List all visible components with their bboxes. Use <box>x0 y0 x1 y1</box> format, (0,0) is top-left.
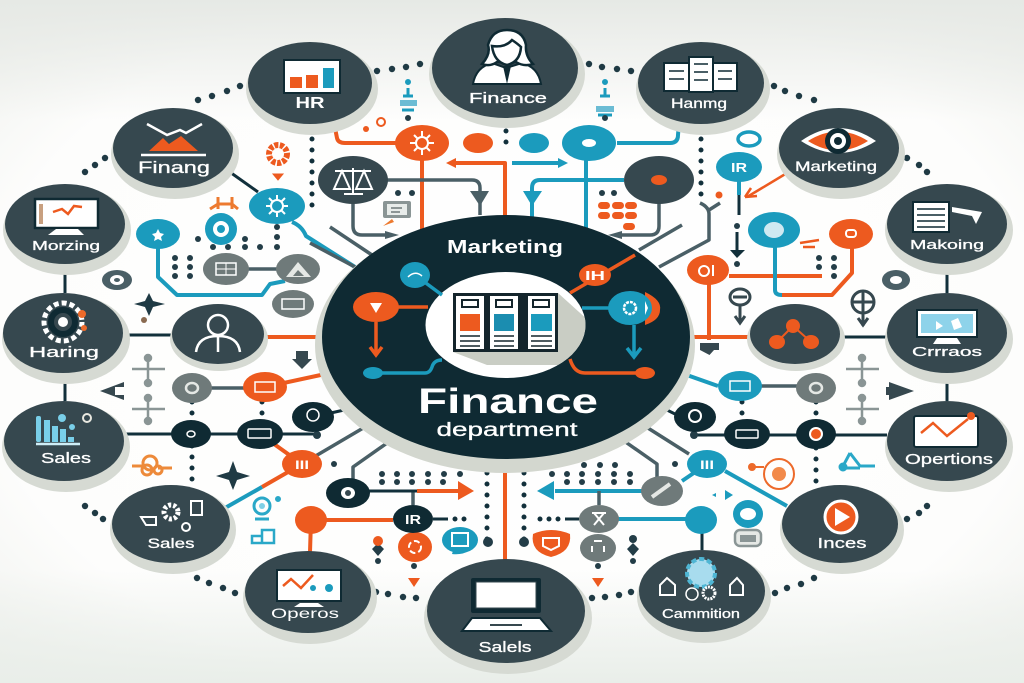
small icon: orange mini left <box>132 456 172 475</box>
small icon: speech bubble <box>738 132 760 146</box>
secondary nodes lower left <box>171 372 433 534</box>
panel: Sales lower left <box>110 485 236 574</box>
panel: Sales left <box>2 401 130 492</box>
icon: star <box>134 293 165 323</box>
secondary nodes upper left <box>136 125 493 318</box>
node: dark target <box>326 478 370 508</box>
node: orange grid: III <box>295 458 309 472</box>
node: dark target <box>796 419 836 449</box>
panel: Crrraos <box>885 293 1013 384</box>
panel: central hub <box>315 215 695 473</box>
heading: Finance: Finance <box>418 382 598 421</box>
small icon: gray box <box>735 530 761 546</box>
panel: HR <box>246 42 378 135</box>
panel: Makoing <box>885 184 1013 275</box>
node: gray triangle <box>276 254 320 284</box>
node: gray pen <box>641 476 683 506</box>
node: teal blob <box>519 133 549 153</box>
small icon: gray loop <box>580 534 616 562</box>
panel: Haring <box>2 293 130 384</box>
icon: monitor <box>35 199 98 235</box>
node: gray x <box>579 505 619 533</box>
panel: Marketing eye <box>777 108 905 199</box>
icon: play <box>825 501 857 533</box>
icon: paper and key <box>913 202 982 232</box>
icon: eye <box>801 128 876 154</box>
small icon: ring with arrow left <box>730 289 750 323</box>
small icon: orange shield <box>533 530 570 557</box>
node: dark card <box>237 419 283 449</box>
icon: star lower <box>216 461 250 490</box>
label: Crrraos <box>912 344 983 359</box>
node: IR: IR <box>731 160 748 175</box>
small icon: teal ring <box>205 213 237 245</box>
small icon: orange loop <box>398 532 432 562</box>
label: Cammition <box>662 606 740 621</box>
label: Opertions <box>905 451 993 468</box>
node: teal grid: III <box>700 458 714 472</box>
dotted vertical links <box>192 120 816 540</box>
panel: Hanmg <box>636 42 770 135</box>
node: orange cluster <box>747 304 845 371</box>
node: gray table <box>203 253 249 285</box>
node: gray ring <box>796 373 836 403</box>
dotted outer ring <box>82 61 930 601</box>
node: orange blob <box>463 133 493 153</box>
node: IR <box>393 505 433 533</box>
node: dark card <box>724 419 770 449</box>
node: IR <box>716 152 762 182</box>
icon: mountain trend <box>141 124 206 155</box>
small icon: orange network <box>210 197 238 209</box>
node: gray ring <box>172 373 212 403</box>
small icon: teal stacked <box>400 80 417 120</box>
hub dot: orange <box>635 367 655 379</box>
connector lines <box>65 120 947 560</box>
heading: Marketing: Marketing <box>447 237 563 257</box>
hub inner connectors <box>365 255 645 373</box>
node: dark with orange dot <box>624 156 694 204</box>
label: Sales <box>148 535 194 551</box>
small icon: orange gear <box>269 145 287 180</box>
node: dark bubble <box>292 402 334 432</box>
icon: cluster <box>769 319 819 349</box>
hub node: orange IH: IH <box>585 268 605 283</box>
label: Salels <box>478 639 532 656</box>
small icon: ring with arrow right <box>852 291 874 326</box>
icon: woman <box>473 30 541 84</box>
node: IR: IR <box>405 513 421 527</box>
label: Sales <box>41 450 91 467</box>
icon: bar chart <box>284 60 340 93</box>
panel: Operos <box>243 551 377 644</box>
secondary nodes lower right <box>579 371 836 534</box>
small icon: teal chat <box>442 527 478 554</box>
node: orange blob <box>295 506 327 534</box>
panel: Marketing left <box>3 184 131 275</box>
label: Operos <box>271 605 339 621</box>
node: teal star <box>136 219 180 249</box>
label: Morzing <box>32 238 100 253</box>
panel: Finang <box>111 108 239 199</box>
arrowheads <box>100 158 914 500</box>
small icon: teal stacked right <box>596 80 614 120</box>
panel: Inces <box>780 485 904 574</box>
icon: gear <box>44 303 87 341</box>
small icon: teal ring right <box>733 500 763 528</box>
node: dark swirl <box>674 402 716 432</box>
label: HR <box>296 95 325 112</box>
icon: trend card <box>914 412 978 447</box>
node: orange lock <box>829 219 873 249</box>
label: Makoing <box>910 237 984 252</box>
node: person <box>170 304 268 371</box>
small icon: orange target <box>749 459 794 489</box>
icon: building books <box>664 57 737 92</box>
node: teal target <box>562 125 616 161</box>
small icon: teal house <box>252 530 274 543</box>
node: dark small <box>171 420 211 448</box>
small ring <box>102 270 132 290</box>
icon: line chart monitor <box>277 570 341 607</box>
panel: Sales bottom <box>424 559 592 674</box>
icon: gears <box>141 501 202 531</box>
label: Inces <box>818 535 866 552</box>
panel: Operations <box>885 401 1013 492</box>
icon: globe and bags <box>660 559 743 600</box>
node: teal blob <box>685 506 717 534</box>
node: teal store <box>718 371 762 401</box>
small icon: teal network <box>840 453 875 470</box>
node: gray card <box>272 290 314 318</box>
node: teal globe <box>748 212 800 248</box>
small ring right <box>882 270 910 290</box>
hub node: teal gear <box>608 291 660 325</box>
secondary nodes upper right <box>519 125 873 285</box>
icon: document columns <box>453 293 558 352</box>
icon: small document <box>383 201 411 226</box>
panel: Finance top <box>429 18 585 128</box>
node: teal gear <box>249 188 305 224</box>
small dots and dot grids <box>172 190 837 569</box>
node: orange store <box>243 372 287 402</box>
icon: bars <box>36 414 91 444</box>
node: orange box <box>687 255 729 285</box>
small cross networks <box>132 355 879 424</box>
hub node: orange pin <box>353 292 399 322</box>
hub dot: teal <box>363 367 383 379</box>
node: scales <box>318 156 388 204</box>
panel: Cammition <box>637 550 771 643</box>
label: Hanmg <box>671 95 727 111</box>
icon: screen <box>917 310 977 344</box>
node: orange grid <box>282 450 322 478</box>
label: Haring <box>29 344 99 361</box>
label: Finang <box>138 158 210 177</box>
node: orange gear <box>395 125 449 161</box>
hub node: teal <box>400 262 430 288</box>
icon: laptop <box>462 578 551 631</box>
small icon: teal bulb <box>254 498 280 519</box>
label: Marketing <box>795 158 877 174</box>
icon: person <box>196 315 240 352</box>
label: Finance <box>469 90 547 107</box>
node: teal grid <box>687 450 727 478</box>
heading: department: department <box>436 420 579 441</box>
hub node: orange IH <box>579 264 611 286</box>
